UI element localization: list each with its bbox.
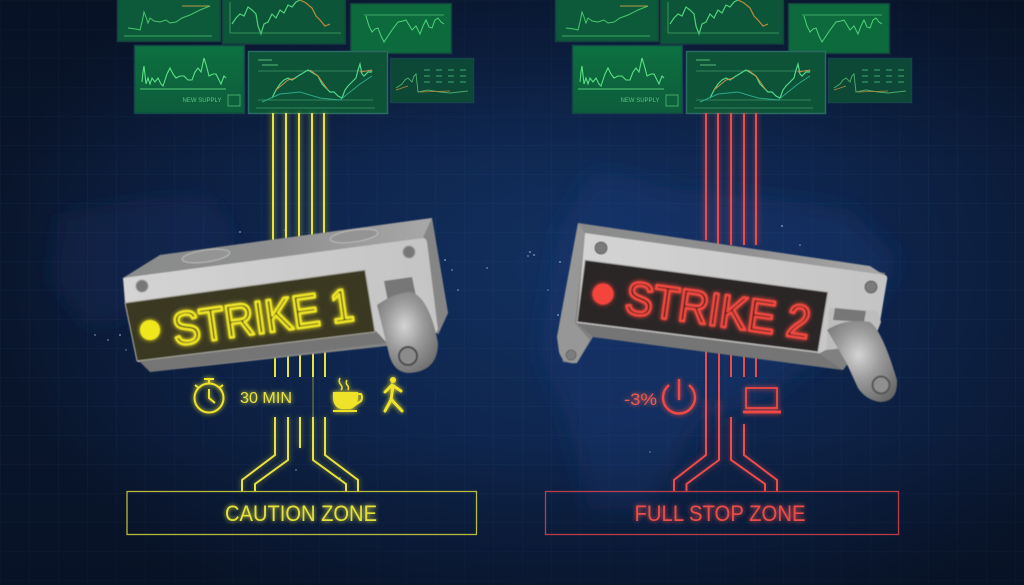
strike 2 label: STRIKE 2 — [622, 271, 814, 349]
panel: right chart monitors — [556, 0, 912, 114]
indicator light — [592, 284, 614, 304]
label: 30 min: 30 MIN — [240, 390, 292, 407]
strike 1 label: STRIKE 1 — [169, 279, 357, 355]
panel: caution zone — [127, 492, 476, 534]
red signal wires — [674, 113, 777, 491]
icon: power symbol — [663, 379, 695, 413]
label: -3%: -3% — [624, 391, 657, 409]
device: strike 1 switch — [123, 218, 448, 373]
device body: top and side — [123, 218, 448, 372]
panel: left chart monitors — [118, 0, 474, 114]
chart caption: left monitor: NEW SUPPLY — [183, 98, 221, 104]
display: strike 1 — [125, 270, 375, 361]
device face — [123, 238, 438, 362]
icon: walking person — [385, 377, 402, 411]
chart caption: right monitor: NEW SUPPLY — [621, 98, 659, 104]
hinge lever — [372, 277, 438, 373]
device body: top and side — [557, 223, 885, 370]
yellow signal wires — [242, 113, 358, 491]
indicator light — [140, 320, 160, 340]
device face — [577, 233, 887, 354]
panel: full stop zone — [546, 492, 898, 534]
icon: laptop — [743, 388, 781, 412]
map specks and debris — [94, 225, 801, 479]
display: strike 2 — [577, 260, 828, 352]
icon: stopwatch — [194, 379, 224, 412]
icon: coffee cup — [333, 378, 362, 411]
hinge lever — [826, 308, 897, 402]
full stop zone label: FULL STOP ZONE — [634, 501, 806, 526]
caution zone label: CAUTION ZONE — [225, 501, 377, 526]
device: strike 2 switch — [557, 223, 897, 402]
